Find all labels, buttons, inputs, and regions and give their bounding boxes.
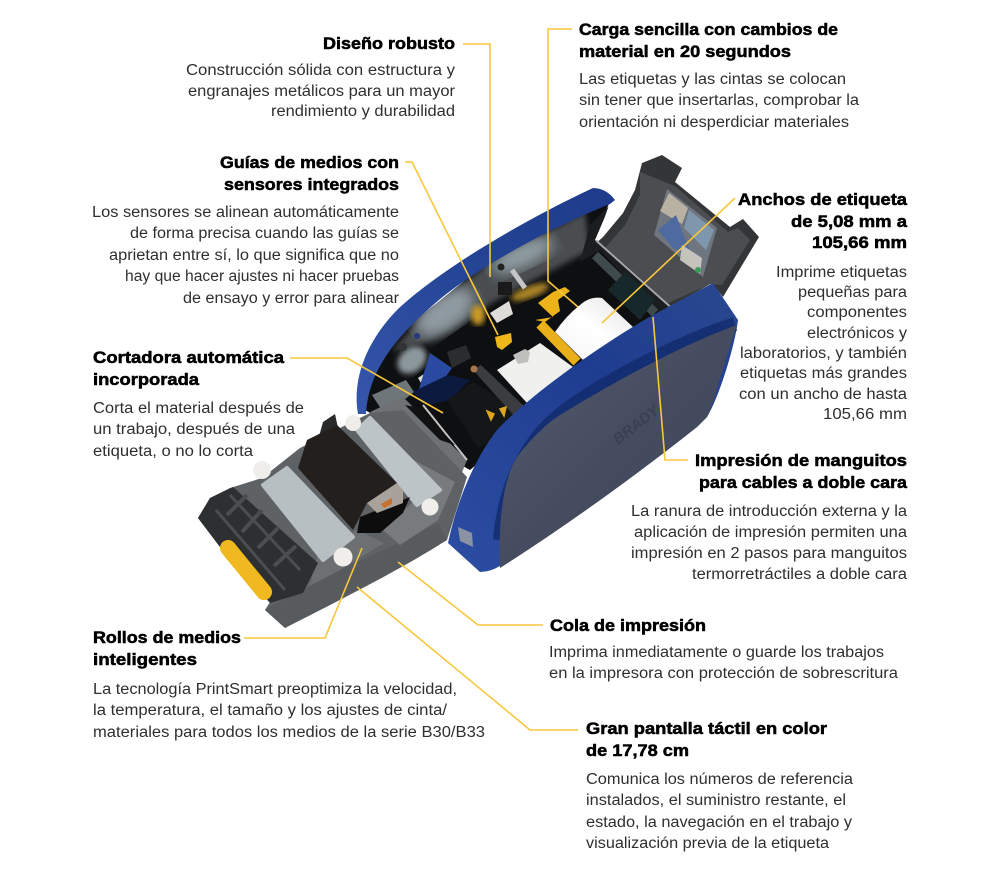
text block: de forma precisa cuando las guías se bbox=[130, 225, 399, 242]
heading: Rollos de medios bbox=[93, 628, 241, 647]
cartridge tray bbox=[198, 410, 467, 628]
white label media roll bbox=[497, 298, 633, 403]
text block: orientación ni desperdiciar materiales bbox=[579, 114, 849, 131]
callout: Cortadora automática bbox=[93, 348, 304, 460]
text block bbox=[579, 71, 859, 131]
heading: Gran pantalla táctil en color bbox=[586, 719, 827, 738]
text block: pequeñas para bbox=[798, 284, 907, 301]
callout: Impresión de manguitos bbox=[631, 451, 908, 583]
heading: Cola de impresión bbox=[550, 616, 706, 635]
heading: Carga sencilla con cambios de bbox=[579, 20, 838, 39]
heading bbox=[93, 348, 285, 389]
callout: Carga sencilla bbox=[579, 20, 859, 131]
text block: Los sensores se alinean automáticamente bbox=[92, 204, 399, 221]
text block: la temperatura, el tamaño y los ajustes de cinta/ bbox=[93, 702, 448, 719]
text block: aprietan entre sí, lo que significa que no bbox=[109, 247, 399, 264]
callout: Guías de medios bbox=[92, 153, 399, 307]
text block: materiales para todos los medios de la serie B30/B33 bbox=[93, 724, 485, 741]
text block: etiquetas más grandes bbox=[740, 365, 907, 382]
heading: Diseño robusto bbox=[323, 34, 455, 53]
text block: Imprime etiquetas bbox=[776, 264, 907, 281]
yellow tray handle bbox=[228, 548, 264, 592]
text block: Construcción sólida con estructura y bbox=[186, 62, 455, 79]
heading bbox=[93, 628, 241, 669]
text block: impresión en 2 pasos para manguitos bbox=[631, 545, 907, 562]
ribbon cartridge bbox=[253, 414, 440, 566]
text block: un trabajo, después de una bbox=[93, 421, 295, 438]
callout: Gran pantalla táctil bbox=[586, 719, 853, 852]
text block: con un ancho de hasta bbox=[739, 386, 907, 403]
printer lid with instruction sticker bbox=[583, 155, 759, 313]
text block: Comunica los números de referencia bbox=[586, 771, 853, 788]
text block: componentes bbox=[807, 304, 907, 321]
yellow media guides bbox=[495, 287, 577, 362]
text block: de ensayo y error para alinear bbox=[183, 290, 399, 307]
heading: incorporada bbox=[93, 370, 200, 389]
text block bbox=[92, 204, 399, 307]
heading bbox=[579, 20, 838, 61]
text block: 105,66 mm bbox=[823, 406, 907, 423]
heading bbox=[220, 153, 399, 194]
heading: Guías de medios con bbox=[220, 153, 399, 172]
text block bbox=[186, 62, 455, 120]
heading: inteligentes bbox=[93, 650, 197, 669]
text block: electrónicos y bbox=[807, 325, 907, 342]
text block: Corta el material después de bbox=[93, 400, 304, 417]
heading: material en 20 segundos bbox=[579, 42, 791, 61]
heading bbox=[586, 719, 827, 760]
heading: Anchos de etiqueta bbox=[738, 190, 908, 209]
automatic cutter bbox=[370, 365, 528, 490]
text block: laboratorios, y también bbox=[740, 345, 907, 362]
text block: sin tener que insertarlas, comprobar la bbox=[579, 92, 859, 109]
text block bbox=[93, 681, 485, 741]
heading: sensores integrados bbox=[224, 175, 399, 194]
printer interior bbox=[365, 202, 672, 470]
text block bbox=[93, 400, 304, 460]
heading: para cables a doble cara bbox=[699, 473, 908, 492]
callout: Anchos de etiqueta bbox=[738, 190, 908, 423]
heading: 105,66 mm bbox=[812, 233, 907, 252]
callout: Rollos de medios bbox=[93, 628, 485, 741]
heading: de 5,08 mm a bbox=[791, 212, 908, 231]
heading: de 17,78 cm bbox=[586, 741, 689, 760]
text block: estado, la navegación en el trabajo y bbox=[586, 814, 852, 831]
text block bbox=[631, 503, 907, 583]
heading bbox=[695, 451, 908, 492]
text block: visualización previa de la etiqueta bbox=[586, 835, 829, 852]
text block: Imprima inmediatamente o guarde los trabajos bbox=[549, 644, 884, 661]
heading bbox=[738, 190, 908, 252]
text block: aplicación de impresión permiten una bbox=[634, 524, 907, 541]
leader lines bbox=[244, 29, 735, 730]
text block: La tecnología PrintSmart preoptimiza la velocidad, bbox=[93, 681, 457, 698]
text block: engranajes metálicos para un mayor bbox=[188, 83, 455, 100]
text block bbox=[549, 644, 898, 682]
printer illustration bbox=[198, 155, 759, 628]
interior screws and hardware bbox=[399, 264, 525, 351]
text block: La ranura de introducción externa y la bbox=[631, 503, 907, 520]
text block: termorretráctiles a doble cara bbox=[692, 566, 907, 583]
text block: instalados, el suministro restante, el bbox=[586, 792, 846, 809]
text block: hay que hacer ajustes ni hacer pruebas bbox=[125, 268, 399, 285]
heading: Impresión de manguitos bbox=[695, 451, 907, 470]
text block: Las etiquetas y las cintas se colocan bbox=[579, 71, 846, 88]
text block bbox=[739, 264, 907, 423]
text block: en la impresora con protección de sobrescritura bbox=[549, 665, 898, 682]
blue front cover: BRADY bbox=[610, 401, 664, 448]
text block: etiqueta, o no lo corta bbox=[93, 443, 253, 460]
callout: Cola de impresión bbox=[549, 616, 898, 682]
text block: rendimiento y durabilidad bbox=[271, 103, 455, 120]
blue front cover bbox=[448, 283, 738, 572]
callout: Diseño robusto bbox=[186, 34, 455, 120]
heading: Cortadora automática bbox=[93, 348, 285, 367]
text block bbox=[586, 771, 853, 852]
blue rear shell bbox=[357, 188, 615, 414]
